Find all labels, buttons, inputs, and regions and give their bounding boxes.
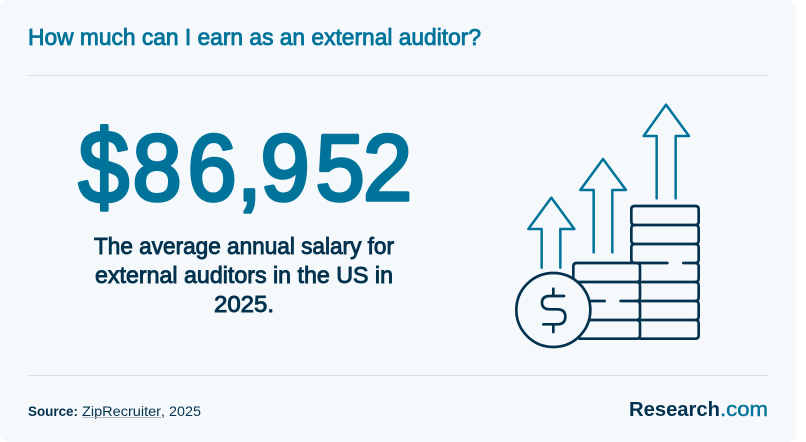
icon: short coin stack [573,263,640,339]
salary description: The average annual salary for [94,233,394,259]
icon: tall coin stack [631,206,699,339]
salary description: 2025. [214,291,274,317]
salary figure: 86,952 [133,116,412,221]
logo: Research.com: .com [720,399,768,421]
source line: ZipRecruiter [82,403,161,419]
logo: Research.com [629,399,768,421]
salary figure: $ [78,109,129,225]
icon: coin stacks with rising arrows [516,105,699,347]
icon: short arrow [528,198,574,268]
icon: dollar coin [516,273,590,347]
logo: Research.com: Research [629,399,720,421]
icon: middle arrow [580,159,626,252]
source line: Source: [28,403,78,419]
source line: , 2025 [161,403,201,419]
salary description: external auditors in the US in [95,262,393,288]
source line [28,403,201,419]
title: How much can I earn as an external auditor? [28,24,481,50]
icon: tall arrow [644,105,689,198]
salary description [94,233,394,317]
